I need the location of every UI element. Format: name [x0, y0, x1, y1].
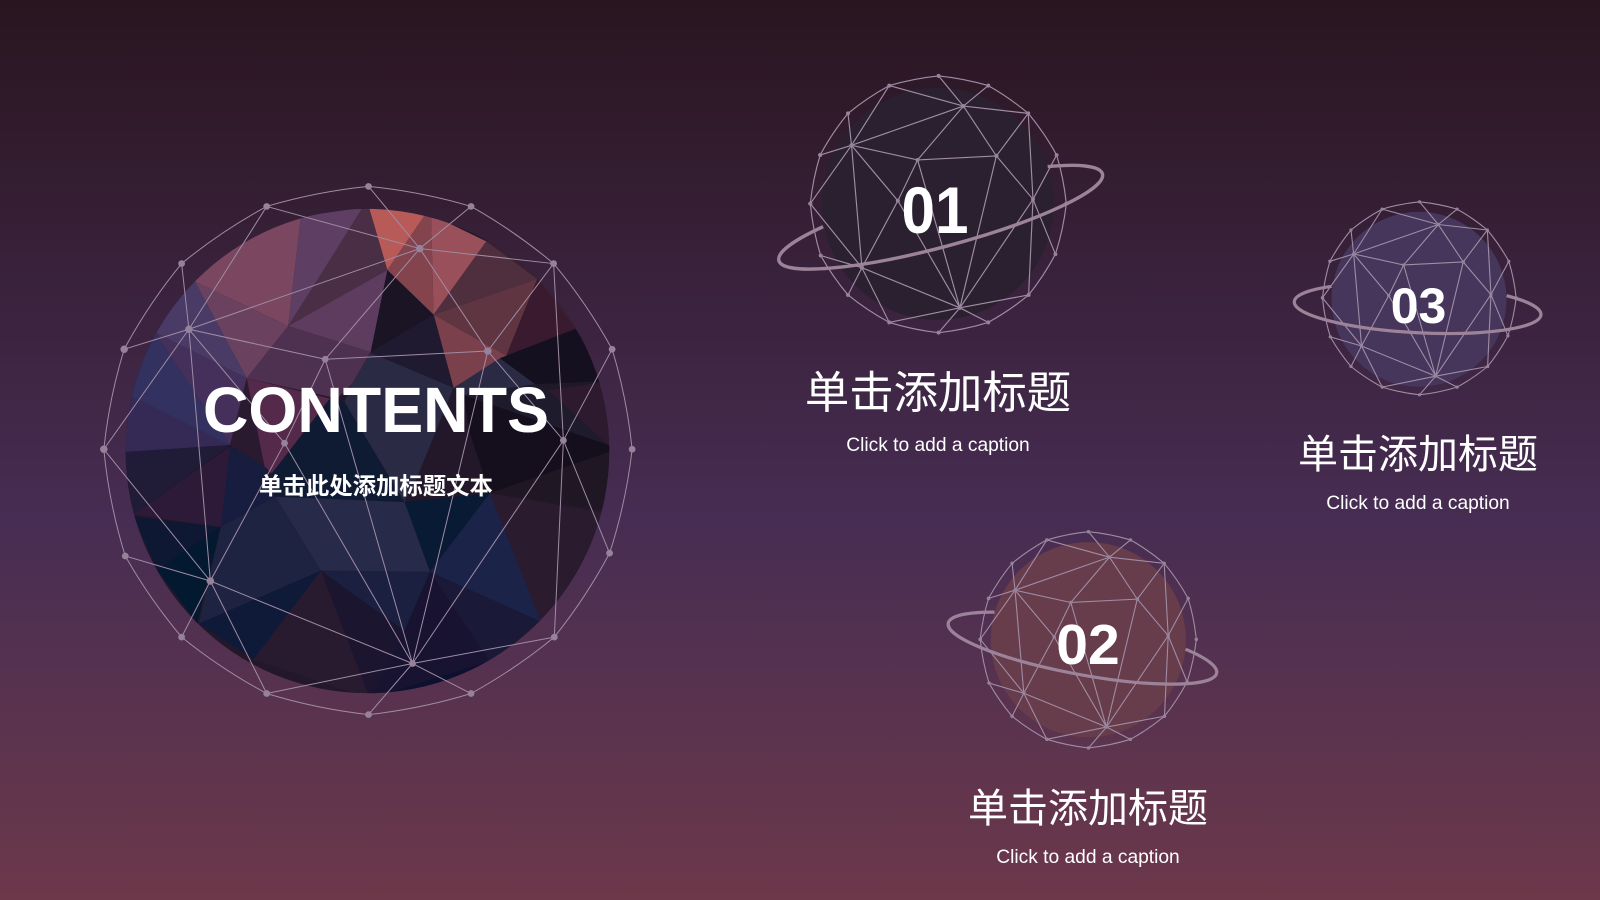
heading: CONTENTS: CONTENTS [203, 374, 549, 446]
caption 03: Click to add a caption [1326, 493, 1510, 514]
caption 01: Click to add a caption [846, 435, 1030, 456]
title 03: 单击添加标题 [1298, 433, 1538, 477]
subtitle: 单击此处添加标题文本 [259, 472, 493, 499]
planet body 02 [991, 542, 1186, 737]
planet 01 [779, 74, 1103, 334]
number 03: 03 [1391, 278, 1446, 334]
number 01: 01 [902, 173, 968, 247]
caption block 03 [1298, 433, 1538, 514]
planet 03 [1294, 201, 1541, 396]
orbit ring 02 [948, 612, 1217, 684]
caption block 02 [968, 787, 1208, 868]
caption block 01 [805, 369, 1071, 456]
number 02: 02 [1056, 613, 1120, 677]
title 02: 单击添加标题 [968, 787, 1208, 831]
main contents sphere [101, 184, 635, 717]
title 01: 单击添加标题 [805, 369, 1071, 418]
mesh 03 [1321, 201, 1517, 396]
planet body 03 [1332, 212, 1506, 387]
caption 02: Click to add a caption [996, 847, 1180, 868]
planet 02 [948, 531, 1217, 749]
planet body 01 [822, 88, 1054, 320]
wireframe mesh [101, 184, 635, 717]
orbit ring 01 [779, 165, 1103, 269]
orbit ring 03 [1294, 286, 1541, 334]
mesh 02 [979, 531, 1198, 749]
mesh 01 [809, 74, 1068, 334]
low-poly sphere fill [119, 206, 614, 699]
